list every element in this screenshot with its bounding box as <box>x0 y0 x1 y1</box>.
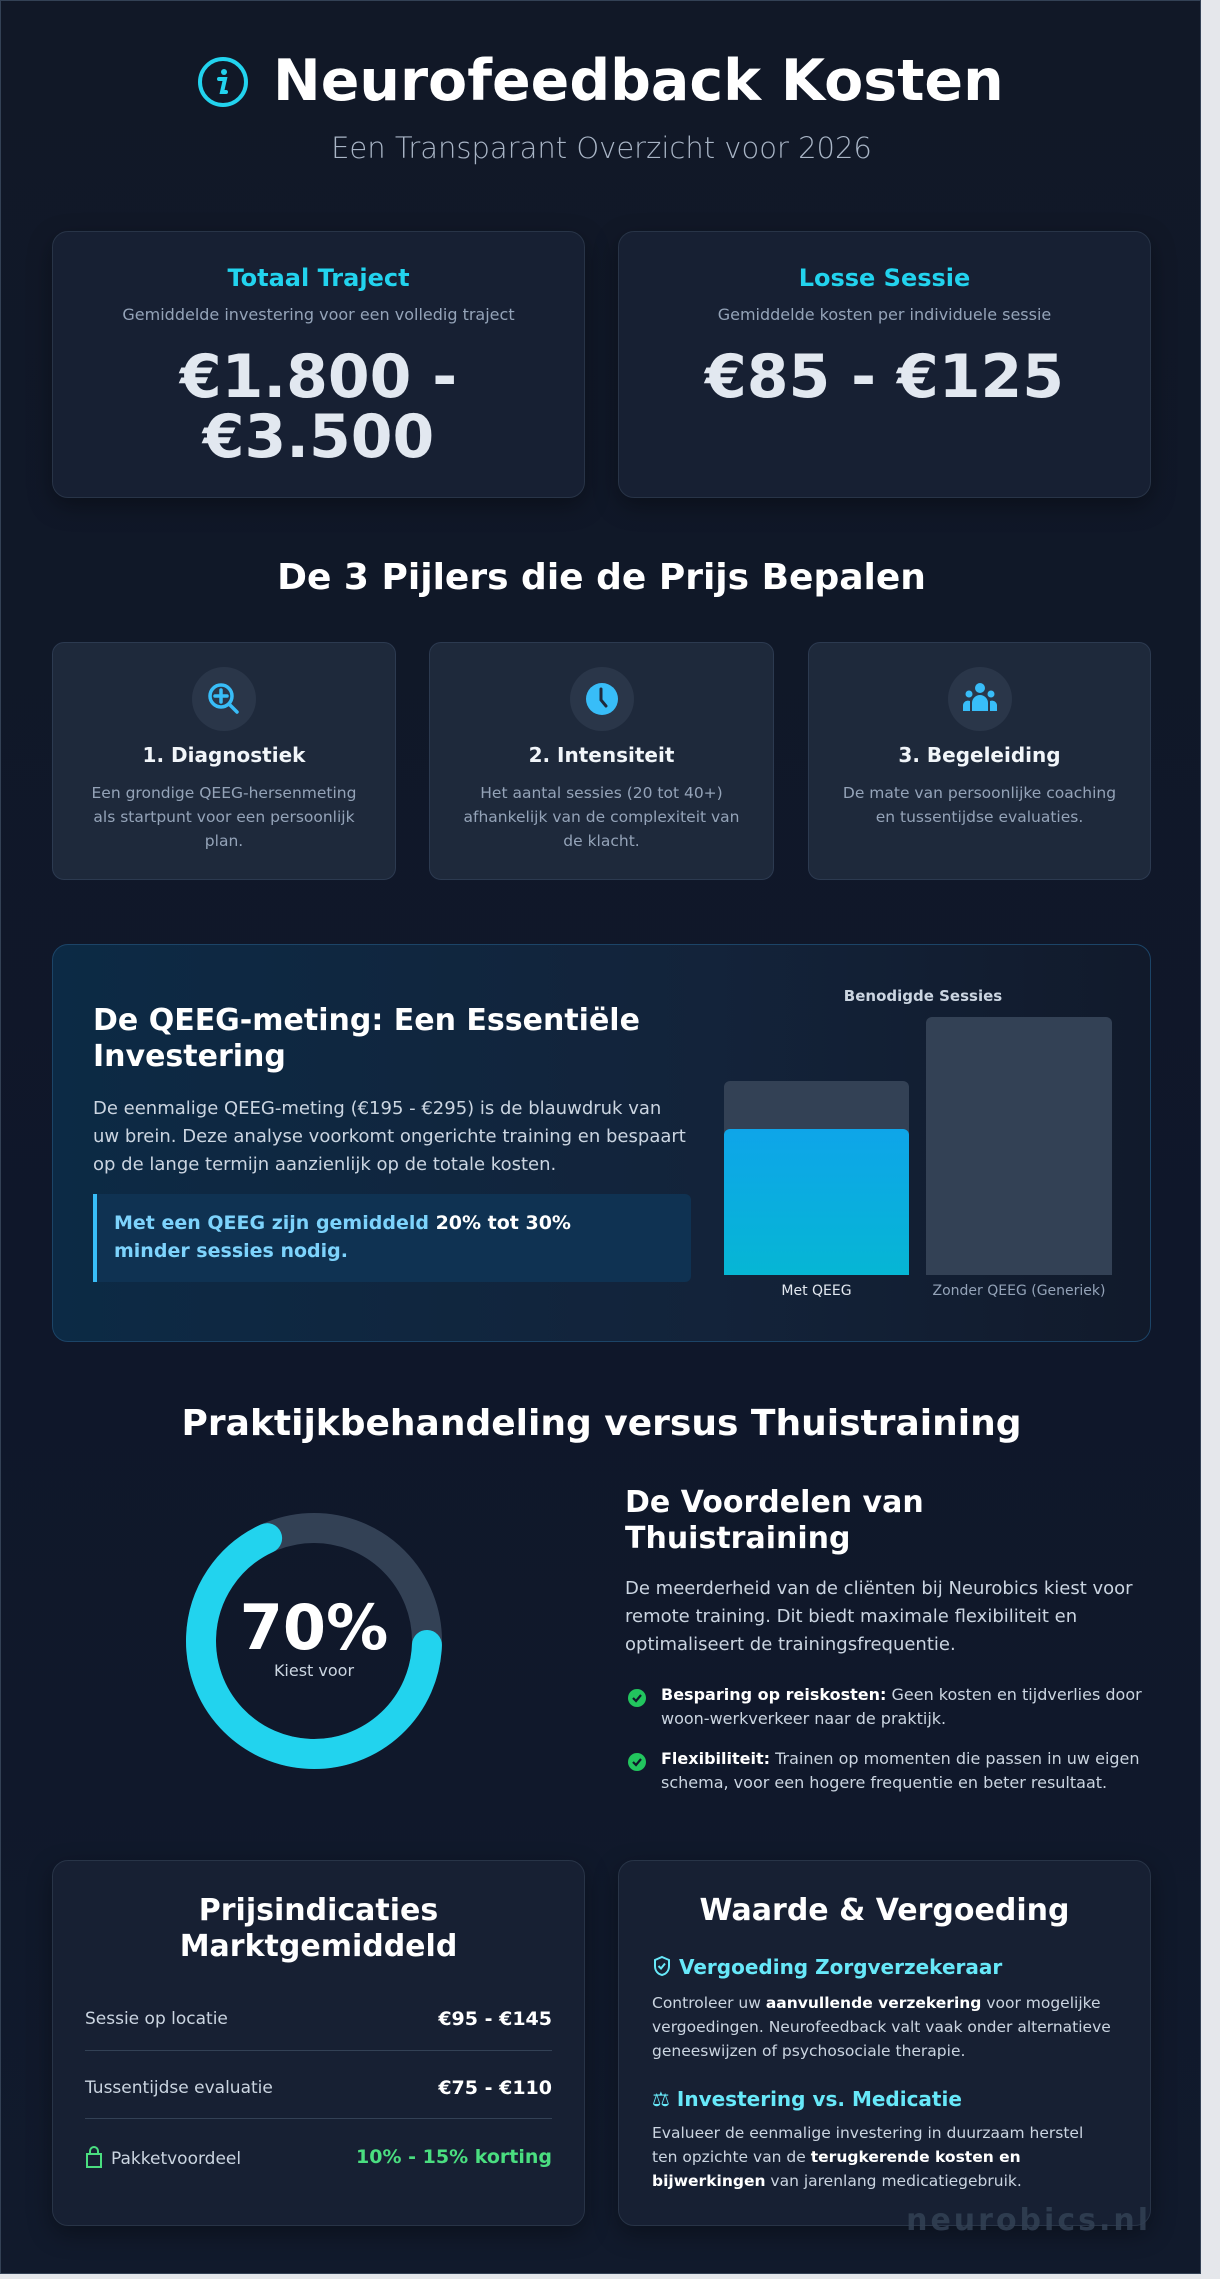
panel: qeeg <box>52 944 1151 1342</box>
qeeg body: De eenmalige QEEG-meting (€195 - €295) is de blauwdruk van uw brein. Deze analyse voorkomt ongerichte training en bespaart op de lange termijn aanzienlijk op de totale kosten. <box>93 1098 686 1175</box>
panel: waarde & vergoeding: Evalueer de eenmalige investering in duurzaam herstel ten opzichte van de terugkerende kosten en bijwerkingen van jarenlang medicatiegebruik. <box>652 2124 1083 2190</box>
subtitle: Een Transparant Overzicht voor 2026 <box>331 131 872 165</box>
panel: diagnostiek: Een grondige QEEG-hersenmeting als startpunt voor een persoonlijk plan. <box>92 784 356 850</box>
panel: prijsindicaties: Sessie op locatie <box>85 2009 228 2029</box>
icon: magnifier <box>192 667 256 731</box>
qeeg title: De QEEG-meting: Een Essentiële Investering <box>93 1003 640 1074</box>
panel: prijsindicaties <box>52 1860 585 2226</box>
text: voordelen thuistraining: De meerderheid van de cliënten bij Neurobics kiest voor remote training. Dit biedt maximale flexibiliteit en optimaliseert de trainingsfrequentie. <box>625 1578 1133 1655</box>
bar chart <box>724 987 1112 1299</box>
panel: prijsindicaties: Tussentijdse evaluatie <box>85 2078 273 2098</box>
donut chart: 70% <box>240 1591 388 1664</box>
panel: waarde & vergoeding: ⚖ Investering vs. Medicatie <box>652 2087 962 2111</box>
panel: diagnostiek <box>52 642 396 880</box>
panel: prijsindicaties: €95 - €145 <box>438 2008 552 2030</box>
bullet: reiskosten: Besparing op reiskosten: Geen kosten en tijdverlies door woon-werkverkeer naar de praktijk. <box>661 1685 1142 1728</box>
heading: pijlers: De 3 Pijlers die de Prijs Bepalen <box>277 557 926 598</box>
panel: diagnostiek: 1. Diagnostiek <box>143 743 305 767</box>
panel: intensiteit <box>429 642 774 880</box>
panel: losse sessie: €85 - €125 <box>705 342 1064 412</box>
panel: totaal traject: €3.500 <box>203 402 434 472</box>
panel: intensiteit: 2. Intensiteit <box>529 743 674 767</box>
icon: info <box>198 57 248 107</box>
panel: begeleiding: 3. Begeleiding <box>898 743 1061 767</box>
bullet: flexibiliteit: Flexibiliteit: Trainen op momenten die passen in uw eigen schema, voor een hogere frequentie en beter resultaat. <box>661 1749 1140 1792</box>
panel: begeleiding <box>808 642 1151 880</box>
panel: prijsindicaties: Prijsindicaties <box>199 1893 438 1928</box>
panel: prijsindicaties: Marktgemiddeld <box>180 1929 457 1964</box>
panel: totaal traject <box>52 231 585 498</box>
bar chart: Benodigde Sessies <box>844 987 1002 1005</box>
text: voordelen thuistraining <box>625 1485 1142 1792</box>
panel: losse sessie: Losse Sessie <box>799 264 970 292</box>
callout: Met een QEEG zijn gemiddeld 20% tot 30% <box>114 1212 571 1234</box>
panel: prijsindicaties: Pakketvoordeel <box>111 2148 241 2168</box>
icon: people <box>948 667 1012 731</box>
panel: begeleiding: De mate van persoonlijke coaching en tussentijdse evaluaties. <box>843 784 1116 826</box>
donut chart: Kiest voor <box>274 1661 354 1680</box>
panel: waarde & vergoeding: Vergoeding Zorgverzekeraar <box>679 1955 1002 1979</box>
panel: waarde & vergoeding: Controleer uw aanvullende verzekering voor mogelijke vergoedingen. Neurofeedback valt vaak onder alternatieve geneeswijzen of psychosociale therapie. <box>652 1994 1111 2060</box>
panel: totaal traject: Gemiddelde investering voor een volledig traject <box>122 305 515 324</box>
watermark: neurobics.nl <box>906 2203 1151 2238</box>
bar chart: Met QEEG <box>781 1283 852 1299</box>
title: Neurofeedback Kosten <box>273 48 1004 114</box>
heading: praktijk vs thuis: Praktijkbehandeling versus Thuistraining <box>182 1403 1021 1444</box>
callout <box>93 1194 691 1282</box>
panel: waarde & vergoeding <box>618 1860 1151 2226</box>
panel: losse sessie: Gemiddelde kosten per individuele sessie <box>718 305 1051 324</box>
panel: waarde & vergoeding: Waarde & Vergoeding <box>700 1893 1069 1928</box>
donut chart <box>186 1513 442 1769</box>
text: voordelen thuistraining: De Voordelen van <box>625 1485 924 1520</box>
panel: losse sessie <box>618 231 1151 498</box>
panel: prijsindicaties: 10% - 15% korting <box>356 2146 552 2168</box>
panel: prijsindicaties: €75 - €110 <box>438 2077 552 2099</box>
icon: clock <box>570 667 634 731</box>
panel: totaal traject: €1.800 - <box>180 342 457 412</box>
panel: intensiteit: Het aantal sessies (20 tot 40+) afhankelijk van de complexiteit van de klacht. <box>463 784 740 850</box>
panel: totaal traject: Totaal Traject <box>227 264 410 292</box>
bar chart: Zonder QEEG (Generiek) <box>932 1283 1105 1299</box>
callout: minder sessies nodig. <box>114 1240 348 1262</box>
text: voordelen thuistraining: Thuistraining <box>625 1521 850 1556</box>
